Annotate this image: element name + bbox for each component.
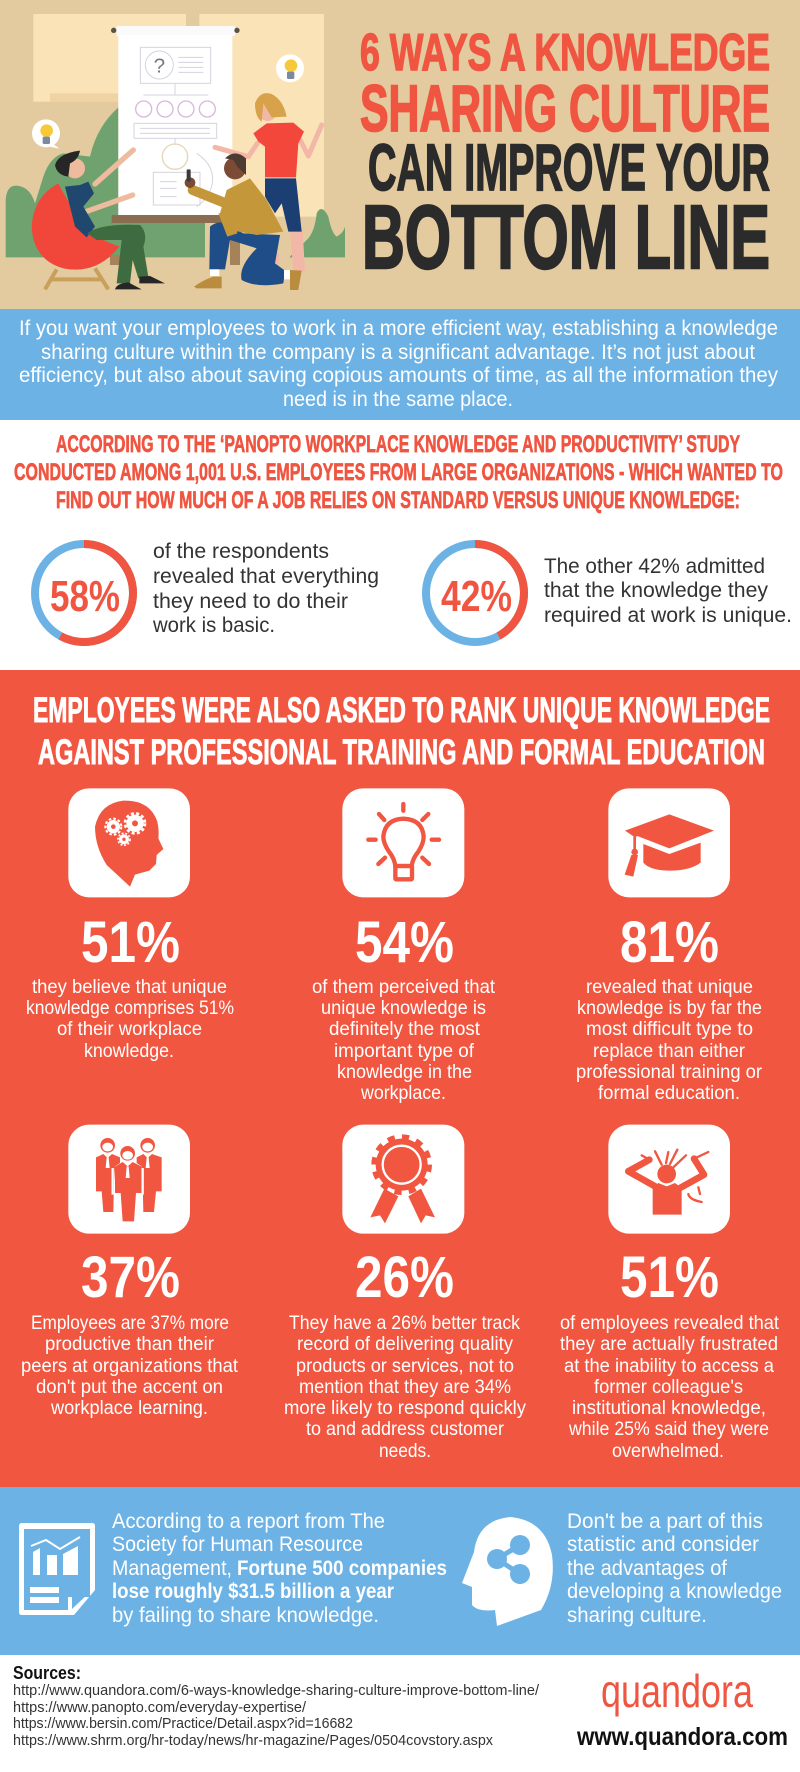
- description: of them perceived that: [312, 977, 496, 998]
- stat: 37 percent productivity: [21, 1125, 239, 1419]
- text: 58 percent description: they need to do their: [153, 590, 348, 613]
- description: while 25% said they were: [568, 1419, 769, 1440]
- text: report statistic: by failing to share knowledge.: [112, 1604, 379, 1627]
- stat: 51 percent knowledge share: [26, 788, 234, 1062]
- number: 51%: [620, 1245, 719, 1310]
- description: knowledge.: [84, 1041, 174, 1062]
- text: 58 percent description: work is basic.: [152, 614, 275, 637]
- description: professional training or: [576, 1062, 763, 1083]
- panel: introduction: sharing culture within the company is a significant advantage. It’s not just about: [41, 341, 755, 364]
- description: [26, 977, 234, 1062]
- donut: 42 percent: 42%: [441, 572, 512, 621]
- description: productive than their: [45, 1334, 215, 1355]
- description: needs.: [379, 1441, 431, 1462]
- illustration: team at flip chart: [6, 14, 345, 290]
- panel: introduction: efficiency, but also about saving copious amounts of time, as all the information they: [19, 364, 778, 387]
- panel: header: [0, 0, 800, 309]
- sources: http://www.quandora.com/6-ways-knowledge-sharing-culture-improve-bottom-line/: [13, 1682, 540, 1699]
- description: knowledge in the: [337, 1062, 472, 1083]
- donut: 42 percent: [426, 544, 524, 642]
- logo: quandora: quandora: [601, 1665, 753, 1717]
- donut: 58 percent: [35, 544, 133, 642]
- icon: frustrated person: [608, 1125, 730, 1234]
- description: they believe that unique: [32, 977, 227, 998]
- panel: introduction: need is in the same place.: [283, 388, 513, 411]
- description: don't put the accent on: [36, 1377, 223, 1398]
- description: they are actually frustrated: [560, 1334, 778, 1355]
- stat: 81 percent difficulty: [576, 788, 763, 1104]
- description: [21, 1313, 239, 1419]
- description: record of delivering quality: [297, 1334, 513, 1355]
- description: institutional knowledge,: [572, 1398, 766, 1419]
- text: call to action: statistic and consider: [567, 1533, 759, 1556]
- description: overwhelmed.: [612, 1441, 724, 1462]
- icon: report document: [19, 1523, 95, 1615]
- description: replace than either: [593, 1041, 746, 1062]
- text: 58 percent description: [152, 540, 379, 637]
- person one: [45, 268, 108, 289]
- bubbles: [32, 119, 60, 147]
- text: 42 percent description: required at work is unique.: [544, 604, 792, 627]
- icon: three business people: [68, 1125, 190, 1234]
- text: report statistic: [112, 1510, 447, 1627]
- description: [284, 1313, 526, 1462]
- person two: [209, 222, 285, 285]
- description: knowledge comprises 51%: [26, 998, 234, 1019]
- icon: head with share symbol: [462, 1517, 553, 1626]
- text: report statistic: According to a report from The: [112, 1510, 385, 1533]
- text: report statistic: Management,: [112, 1557, 232, 1580]
- description: They have a 26% better track: [289, 1313, 520, 1334]
- panel: conclusion: [0, 1487, 800, 1655]
- text: 42 percent description: [544, 555, 792, 627]
- description: Employees are 37% more: [31, 1313, 229, 1334]
- text: call to action: the advantages of: [567, 1557, 727, 1580]
- description: of employees revealed that: [560, 1313, 780, 1334]
- description: [560, 1313, 780, 1462]
- description: products or services, not to: [296, 1356, 514, 1377]
- sources: https://www.bersin.com/Practice/Detail.aspx?id=16682: [13, 1715, 353, 1732]
- description: knowledge is by far the: [577, 998, 762, 1019]
- description: mention that they are 34%: [299, 1377, 511, 1398]
- description: more likely to respond quickly: [284, 1398, 526, 1419]
- icon: graduation cap: [608, 788, 730, 897]
- icon: head with gears: [68, 788, 190, 897]
- description: definitely the most: [329, 1019, 481, 1040]
- illustration: team at flip chart: ?: [154, 55, 165, 78]
- description: peers at organizations that: [21, 1356, 239, 1377]
- person three: [267, 230, 305, 272]
- heading: rankings: [33, 691, 770, 772]
- description: important type of: [334, 1041, 475, 1062]
- text: call to action: [567, 1510, 782, 1627]
- number: 54%: [355, 910, 454, 975]
- number: 26%: [355, 1245, 454, 1310]
- description: most difficult type to: [586, 1019, 753, 1040]
- text: 42 percent description: that the knowledge they: [544, 579, 768, 602]
- text: 42 percent description: The other 42% admitted: [544, 555, 765, 578]
- stat: 51 percent frustrated: [560, 1125, 780, 1462]
- text: call to action: sharing culture.: [567, 1604, 707, 1627]
- text: 58 percent description: of the respondents: [153, 540, 329, 563]
- description: former colleague's: [594, 1377, 743, 1398]
- panel: introduction: If you want your employees to work in a more efficient way, establishing a knowledge: [19, 317, 778, 340]
- sources: Sources:: [13, 1663, 81, 1683]
- number: 51%: [81, 910, 180, 975]
- description: to and address customer: [306, 1419, 505, 1440]
- sources: https://www.panopto.com/everyday-expertise/: [13, 1699, 307, 1716]
- description: formal education.: [598, 1083, 740, 1104]
- description: at the inability to access a: [564, 1356, 774, 1377]
- heading: study: [14, 431, 783, 514]
- description: workplace learning.: [50, 1398, 208, 1419]
- text: 58 percent description: revealed that everything: [153, 565, 379, 588]
- icon: award ribbon: [342, 1125, 464, 1234]
- description: workplace.: [360, 1083, 446, 1104]
- sources: [13, 1663, 540, 1749]
- sources: https://www.shrm.org/hr-today/news/hr-magazine/Pages/0504covstory.aspx: [13, 1732, 493, 1749]
- stat: 54 percent importance: [312, 788, 496, 1104]
- donut: 58 percent: 58%: [50, 572, 120, 621]
- number: 81%: [620, 910, 719, 975]
- text: call to action: developing a knowledge: [567, 1580, 782, 1603]
- text: report statistic: Society for Human Resource: [112, 1533, 363, 1556]
- description: [312, 977, 496, 1104]
- panel: introduction: [0, 309, 800, 420]
- text: call to action: Don't be a part of this: [567, 1510, 763, 1533]
- stat: 26 percent track record: [284, 1125, 526, 1462]
- description: of their workplace: [57, 1019, 202, 1040]
- panel: rankings: [0, 670, 800, 1487]
- description: [576, 977, 763, 1104]
- text: report statistic: Fortune 500 companies: [237, 1557, 447, 1580]
- text: report statistic: lose roughly $31.5 billion a year: [112, 1580, 394, 1603]
- title: [360, 24, 770, 288]
- description: revealed that unique: [586, 977, 753, 998]
- description: unique knowledge is: [321, 998, 486, 1019]
- icon: light bulb: [342, 788, 464, 897]
- number: 37%: [81, 1245, 180, 1310]
